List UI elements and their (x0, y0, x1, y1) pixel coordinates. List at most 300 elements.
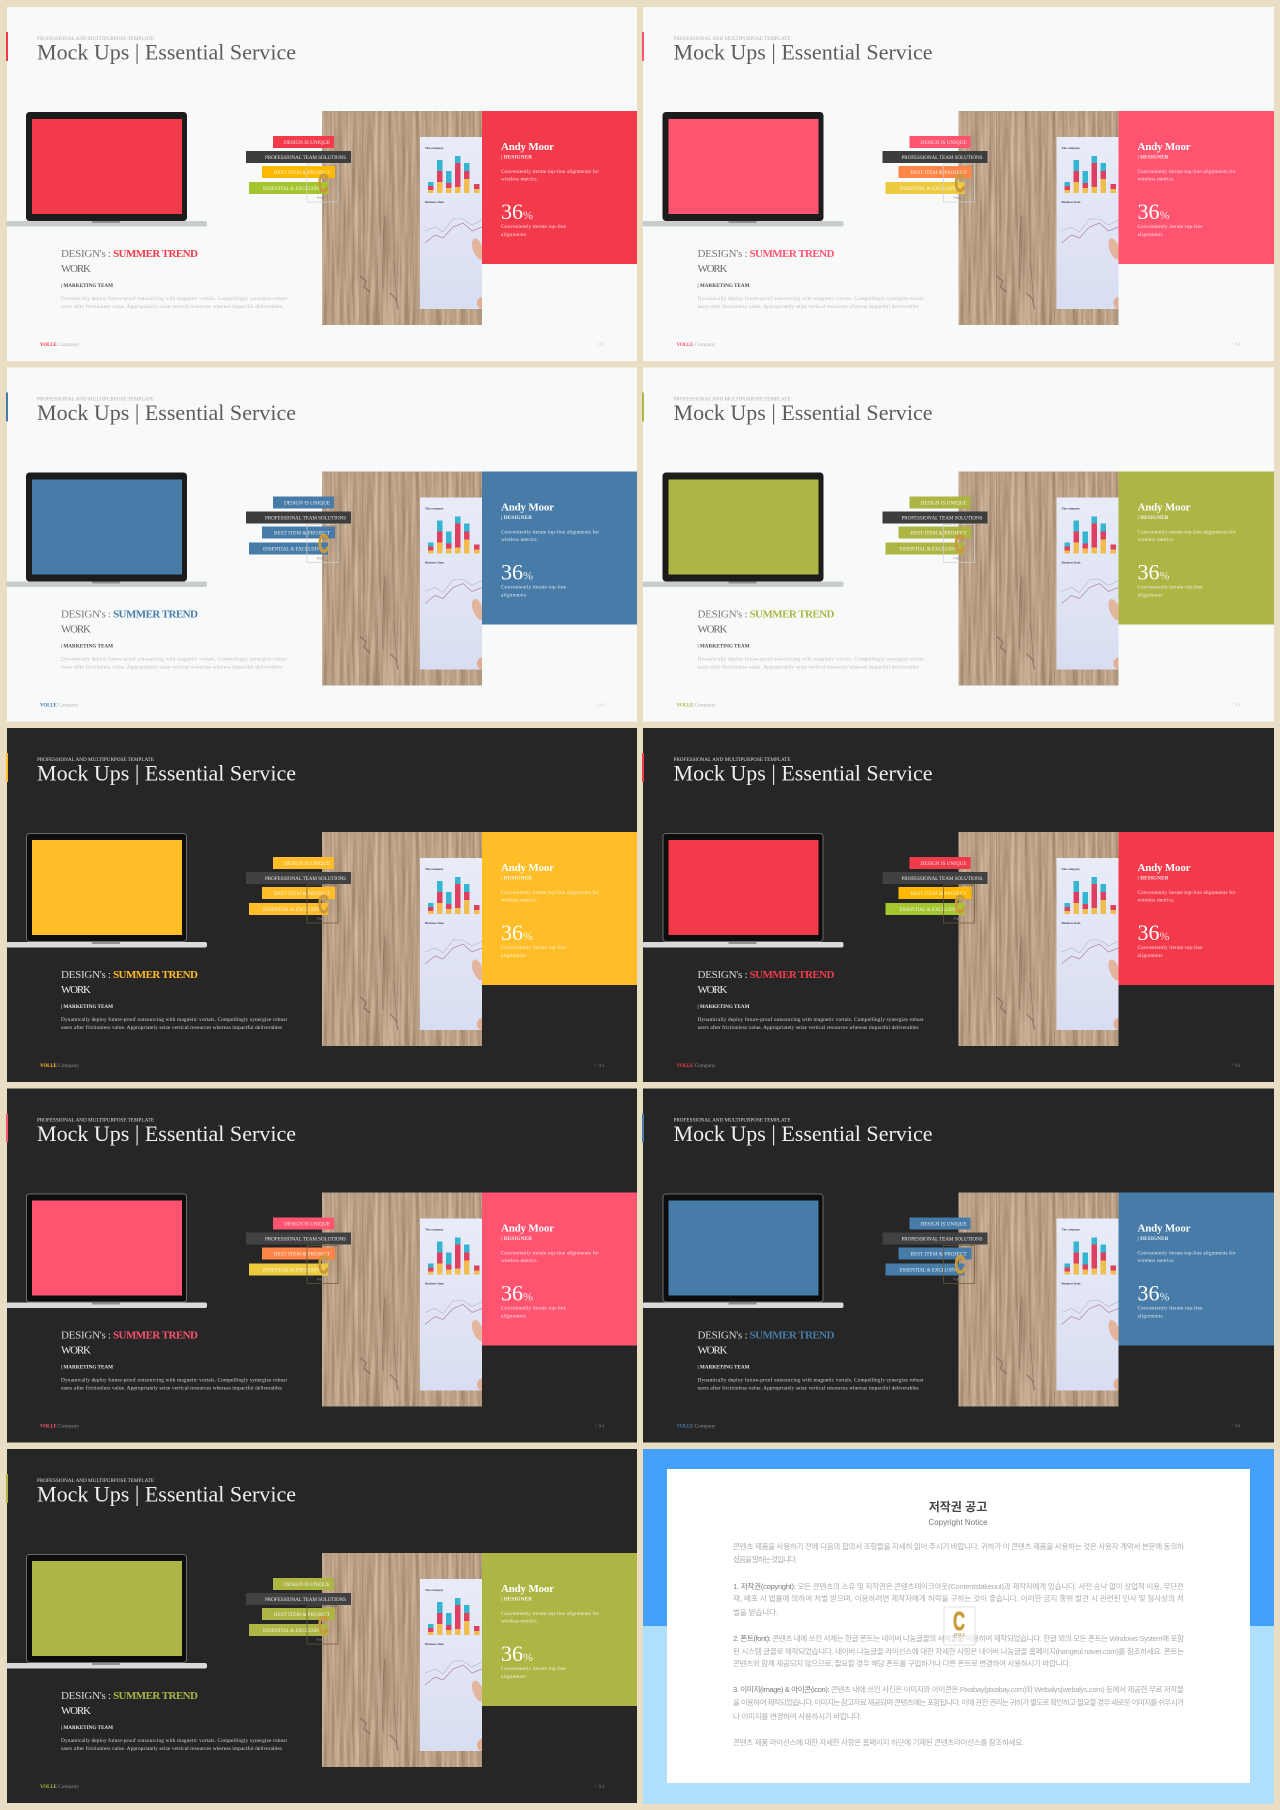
design heading (698, 1330, 835, 1356)
description: users after frictionless value. Appropriately seize vertical resources whereas impactful deliverables (61, 1024, 282, 1031)
accent bar (6, 1114, 8, 1142)
design heading: SUMMER TREND (750, 608, 835, 620)
colour panel: Andy Moor (1138, 141, 1191, 153)
design heading (698, 969, 835, 996)
colour panel: % (1160, 1290, 1170, 1304)
tag list: BEST ITEM & PROJECT (274, 1612, 331, 1618)
tag list: DESIGN IS UNIQUE (284, 1222, 330, 1228)
title: PROFESSIONAL AND MULTIPURPOSE TEMPLATE (674, 1118, 790, 1124)
photo with charts (322, 1192, 487, 1406)
watermark: Free (954, 196, 961, 200)
colour panel: | DESIGNER (1138, 876, 1169, 882)
design heading: DESIGN's : (61, 1690, 111, 1702)
watermark (944, 1606, 975, 1645)
footer: VOLLE (676, 342, 694, 348)
tag list: PROFESSIONAL TEAM SOLUTIONS (265, 1597, 346, 1603)
colour panel (482, 472, 637, 624)
tag list (882, 136, 988, 194)
watermark (307, 1246, 338, 1284)
footer: Company (58, 1063, 79, 1069)
photo with charts (958, 472, 1124, 686)
footer: VOLLE (40, 342, 58, 348)
colour panel: wireless metrics. (1138, 176, 1174, 182)
footer: VOLLE (40, 1424, 58, 1430)
footer: / 04 (1232, 1064, 1241, 1069)
colour panel: Conveniently iterate top-line alignments for (1138, 528, 1236, 536)
clause 3: 3. 이미지(image) & 아이콘(icon): 콘텐츠 내에 쓰인 사진은 이미지와 아이콘은 Pixabay(pixabay.com)와 Webalys(webalys.com) 등에서 제공한 무료 저작물 (733, 1684, 1184, 1694)
team label: | MARKETING TEAM (61, 1004, 113, 1010)
footer: / 04 (1232, 1424, 1241, 1430)
colour panel: Conveniently iterate top-line (501, 584, 567, 590)
clause 2: 2. 폰트(font): 콘텐츠 내에 쓰인 서체는 한글 폰트는 네이버 나눔글꼴의 서체들을 이용하여 제작되었습니다. 한글 외의 모든 폰트는 Windows System에 포함 (733, 1633, 1184, 1643)
footer (40, 1063, 604, 1069)
colour panel: alignments (501, 592, 526, 598)
tag list: DESIGN IS UNIQUE (920, 500, 966, 506)
design heading: SUMMER TREND (113, 248, 198, 260)
colour panel: Conveniently iterate top-line alignments for (1138, 1250, 1236, 1256)
watermark: C (954, 168, 966, 198)
design heading: DESIGN's : (61, 248, 111, 260)
design heading (61, 969, 198, 996)
tag list: ESSENTIAL & EXCLUSIVE (263, 1268, 323, 1274)
watermark: C (318, 528, 329, 558)
colour panel: alignments (1138, 953, 1162, 959)
watermark: Free (954, 556, 961, 560)
accent bar (642, 753, 644, 782)
description: users after frictionless value. Appropriately seize vertical resources whereas impactful deliverables (61, 303, 282, 310)
title: Mock Ups | Essential Service (37, 1121, 296, 1146)
design heading: DESIGN's : (698, 248, 748, 260)
colour panel (1118, 832, 1274, 985)
footer: Company (58, 702, 79, 708)
slide 5: dark amber (6, 728, 637, 1082)
copyright heading: Copyright Notice (928, 1518, 988, 1527)
design heading: WORK (61, 1705, 91, 1717)
laptop mockup (6, 1194, 207, 1308)
colour panel: | DESIGNER (501, 154, 532, 160)
title: PROFESSIONAL AND MULTIPURPOSE TEMPLATE (674, 757, 790, 763)
title: PROFESSIONAL AND MULTIPURPOSE TEMPLATE (37, 1478, 154, 1484)
accent bar (642, 392, 644, 422)
title: PROFESSIONAL AND MULTIPURPOSE TEMPLATE (37, 36, 154, 42)
design heading (698, 608, 835, 636)
description: Dynamically deploy future-proof outsourcing with magnetic vortals. Compellingly synergize robust (61, 1016, 288, 1023)
description (61, 656, 288, 670)
photo with charts (958, 832, 1124, 1046)
colour panel (1118, 111, 1274, 264)
description: Dynamically deploy future-proof outsourcing with magnetic vortals. Compellingly synergize robust (61, 295, 288, 302)
colour panel: Conveniently iterate top-line alignments for (501, 1610, 599, 1617)
design heading: DESIGN's : (698, 1330, 748, 1342)
description: users after frictionless value. Appropriately seize vertical resources whereas impactful deliverables (698, 1024, 918, 1031)
colour panel: Andy Moor (501, 141, 554, 153)
footer: VOLLE (40, 702, 58, 708)
watermark (307, 164, 338, 202)
colour panel: % (1160, 208, 1170, 222)
design heading: DESIGN's : (61, 969, 111, 981)
design heading: SUMMER TREND (113, 608, 198, 620)
colour panel: Conveniently iterate top-line (501, 1306, 567, 1312)
watermark: C (318, 1250, 329, 1280)
team label: | MARKETING TEAM (61, 1364, 113, 1370)
closing line: 콘텐츠 제품 라이선스에 대한 자세한 사항은 홈페이지 하단에 기재된 콘텐츠라이선스를 참조하세요. (733, 1737, 1024, 1747)
tag list: DESIGN IS UNIQUE (920, 140, 966, 146)
colour panel: wireless metrics. (501, 1618, 538, 1624)
tag list (246, 1218, 351, 1276)
colour panel: % (523, 929, 533, 943)
title: Mock Ups | Essential Service (674, 400, 932, 425)
description (698, 1016, 924, 1031)
colour panel (482, 832, 637, 985)
tag list: ESSENTIAL & EXCLUSIVE (900, 186, 960, 192)
footer (676, 702, 1241, 708)
tag list: DESIGN IS UNIQUE (920, 1222, 966, 1228)
title: PROFESSIONAL AND MULTIPURPOSE TEMPLATE (674, 36, 790, 42)
design heading (61, 1690, 198, 1717)
colour panel: wireless metrics. (501, 898, 538, 904)
intro paragraph (733, 1541, 1184, 1564)
colour panel: % (523, 568, 533, 582)
title: Mock Ups | Essential Service (37, 40, 296, 64)
colour panel: 36 (1138, 920, 1160, 945)
colour panel (482, 1192, 637, 1346)
photo with charts (958, 111, 1124, 325)
colour panel: alignments (501, 1674, 526, 1680)
accent bar (642, 1114, 644, 1142)
title: PROFESSIONAL AND MULTIPURPOSE TEMPLATE (37, 757, 154, 763)
laptop mockup (642, 112, 844, 226)
clause 1: 재, 배포 시 법률에 의하여 처벌 받으며, 이용하려면 제작자에게 허락을 구하는 것이 좋습니다. 이러한 금지 행위 발견 시 관련된 민사 및 형사상의 처 (733, 1593, 1184, 1603)
description: Dynamically deploy future-proof outsourcing with magnetic vortals. Compellingly synergize robust (698, 1016, 924, 1023)
colour panel: 36 (501, 199, 523, 224)
description (61, 1737, 288, 1752)
design heading: SUMMER TREND (113, 1330, 198, 1342)
colour panel: Conveniently iterate top-line (501, 1666, 567, 1672)
description: users after frictionless value. Appropriately seize vertical resources whereas impactful deliverables (61, 1384, 282, 1392)
intro paragraph: 셨음을 말하는 것입니다. (733, 1554, 797, 1564)
tag list: BEST ITEM & PROJECT (274, 1252, 331, 1258)
watermark: Free (317, 917, 324, 921)
title: PROFESSIONAL AND MULTIPURPOSE TEMPLATE (37, 1118, 154, 1124)
colour panel: alignments (1138, 1314, 1162, 1320)
laptop mockup (642, 1194, 844, 1308)
design heading (698, 248, 835, 275)
footer: Company (694, 702, 716, 708)
accent bar (6, 32, 8, 61)
colour panel: 36 (501, 1280, 523, 1306)
colour panel: Conveniently iterate top-line (501, 945, 567, 951)
team label: | MARKETING TEAM (698, 644, 750, 650)
colour panel: Conveniently iterate top-line (501, 224, 567, 230)
description: Dynamically deploy future-proof outsourcing with magnetic vortals. Compellingly synergize robust (698, 1376, 924, 1384)
colour panel: Conveniently iterate top-line alignments for (1138, 168, 1236, 175)
colour panel: % (1160, 929, 1170, 943)
colour panel: wireless metrics. (1138, 537, 1174, 543)
footer: VOLLE (40, 1063, 58, 1069)
watermark: C (318, 1610, 329, 1640)
colour panel: % (523, 208, 533, 222)
watermark: C (954, 889, 966, 919)
description: users after frictionless value. Appropriately seize vertical resources whereas impactful deliverables (698, 303, 918, 310)
description: Dynamically deploy future-proof outsourcing with magnetic vortals. Compellingly synergize robust (698, 656, 924, 662)
photo with charts (322, 111, 487, 325)
tag list: DESIGN IS UNIQUE (284, 140, 330, 146)
colour panel: alignments (1138, 592, 1162, 598)
team label: | MARKETING TEAM (698, 1004, 750, 1010)
footer: Company (694, 1063, 716, 1069)
photo with charts (958, 1192, 1124, 1406)
watermark (944, 1246, 974, 1284)
clause 3 (733, 1684, 1184, 1721)
colour panel: | DESIGNER (1138, 1236, 1169, 1242)
design heading: WORK (698, 263, 728, 275)
slide 7: dark pink (6, 1088, 637, 1442)
design heading: SUMMER TREND (750, 1330, 835, 1342)
tag list: ESSENTIAL & EXCLUSIVE (263, 186, 323, 192)
footer (40, 342, 604, 348)
colour panel: 36 (1138, 1280, 1160, 1306)
laptop mockup (6, 1554, 207, 1668)
title: Mock Ups | Essential Service (674, 40, 932, 64)
accent bar (6, 753, 8, 782)
design heading: WORK (61, 1344, 91, 1356)
colour panel: Andy Moor (501, 1583, 554, 1595)
colour panel: Andy Moor (1138, 502, 1191, 514)
tag list: BEST ITEM & PROJECT (274, 170, 331, 176)
design heading: WORK (61, 624, 91, 636)
title: PROFESSIONAL AND MULTIPURPOSE TEMPLATE (37, 396, 154, 402)
colour panel: Andy Moor (1138, 862, 1191, 874)
tag list: ESSENTIAL & EXCLUSIVE (263, 907, 323, 913)
tag list: PROFESSIONAL TEAM SOLUTIONS (902, 1236, 983, 1242)
title: Mock Ups | Essential Service (674, 1121, 932, 1146)
slide 3: light blue (6, 368, 637, 722)
clause 2 (733, 1633, 1184, 1668)
description (698, 1376, 924, 1392)
laptop mockup (642, 473, 844, 587)
footer: VOLLE (676, 1424, 694, 1430)
watermark: C (318, 168, 329, 198)
watermark: C (953, 1606, 965, 1636)
description (698, 295, 924, 310)
clause 1: 벌을 받습니다. (733, 1607, 778, 1617)
colour panel: Conveniently iterate top-line alignments for (501, 1250, 599, 1256)
slide 4: light olive (642, 368, 1274, 722)
footer (676, 1424, 1241, 1430)
design heading: WORK (698, 624, 728, 636)
tag list: BEST ITEM & PROJECT (910, 530, 967, 536)
colour panel: | DESIGNER (1138, 515, 1169, 521)
colour panel: Conveniently iterate top-line (1138, 1306, 1203, 1312)
colour panel: wireless metrics. (501, 537, 538, 543)
watermark: C (954, 528, 966, 558)
colour panel: Conveniently iterate top-line (1138, 584, 1203, 590)
laptop mockup (6, 112, 207, 226)
tag list: ESSENTIAL & EXCLUSIVE (900, 546, 960, 552)
description: users after frictionless value. Appropriately seize vertical resources whereas impactful deliverables (698, 664, 918, 670)
colour panel: Conveniently iterate top-line (1138, 945, 1203, 951)
footer: / 04 (595, 1785, 604, 1790)
description: users after frictionless value. Appropriately seize vertical resources whereas impactful deliverables (61, 1745, 282, 1752)
tag list: BEST ITEM & PROJECT (274, 891, 331, 897)
description: users after frictionless value. Appropriately seize vertical resources whereas impactful deliverables (61, 664, 282, 670)
footer (676, 342, 1241, 348)
tag list (882, 1218, 988, 1276)
description: Dynamically deploy future-proof outsourcing with magnetic vortals. Compellingly synergize robust (61, 1376, 288, 1384)
footer: Company (58, 342, 79, 348)
design heading: SUMMER TREND (113, 969, 198, 981)
watermark (944, 885, 974, 923)
tag list: DESIGN IS UNIQUE (284, 1582, 330, 1588)
watermark (944, 164, 974, 202)
colour panel: | DESIGNER (1138, 154, 1169, 160)
team label: | MARKETING TEAM (61, 283, 113, 289)
watermark: Free (954, 917, 961, 921)
footer: / 04 (595, 704, 604, 708)
footer: VOLLE (40, 1784, 58, 1790)
colour panel: | DESIGNER (501, 515, 532, 521)
team label: | MARKETING TEAM (698, 283, 750, 289)
slide 2: light pink (642, 7, 1274, 361)
watermark: Free (317, 1278, 324, 1282)
tag list: PROFESSIONAL TEAM SOLUTIONS (265, 1236, 346, 1242)
tag list: PROFESSIONAL TEAM SOLUTIONS (265, 876, 346, 882)
clause 2: 된 시스템 글꼴로 제작되었습니다. 네이버 나눔글꼴 라이선스에 대한 자세한 사항은 네이버 나눔글꼴 홈페이지(hangeul.naver.com)를 참조하세요. 폰트는 (733, 1646, 1184, 1656)
accent bar (642, 32, 644, 61)
watermark: Free (317, 556, 324, 560)
tag list: PROFESSIONAL TEAM SOLUTIONS (265, 155, 346, 161)
title: Mock Ups | Essential Service (37, 760, 296, 786)
tag list: PROFESSIONAL TEAM SOLUTIONS (265, 516, 346, 522)
title: Mock Ups | Essential Service (37, 400, 296, 425)
design heading: WORK (61, 263, 91, 275)
colour panel: Conveniently iterate top-line alignments for (501, 168, 599, 175)
colour panel: 36 (501, 920, 523, 945)
design heading: SUMMER TREND (113, 1690, 198, 1702)
footer: Company (58, 1784, 79, 1790)
colour panel: 36 (1138, 560, 1160, 584)
footer: / 04 (1232, 704, 1241, 708)
intro paragraph: 콘텐츠 제품을 사용하기 전에 다음의 합의서 조항들을 자세히 읽어 주시기 바랍니다. 귀하가 이 콘텐츠 제품을 사용하는 것은 사용자 계약서 본문에 동의하 (733, 1541, 1184, 1551)
clause 1: 1. 저작권(copyright): 모든 콘텐츠의 소유 및 저작권은 콘텐츠테이크아웃(Contentstakeout)과 제작자에게 있습니다. 사전 승낙 없이 상업적 이용, 무단전 (733, 1581, 1184, 1591)
footer (676, 1063, 1241, 1069)
description: Dynamically deploy future-proof outsourcing with magnetic vortals. Compellingly synergize robust (61, 656, 288, 662)
colour panel: % (523, 1650, 533, 1664)
footer: VOLLE (676, 702, 694, 708)
description (698, 656, 924, 670)
photo with charts (322, 1553, 487, 1767)
colour panel: Andy Moor (1138, 1222, 1191, 1234)
design heading: DESIGN's : (698, 969, 748, 981)
colour panel: | DESIGNER (501, 876, 532, 882)
watermark: C (318, 889, 329, 919)
tag list (246, 1578, 351, 1636)
colour panel: 36 (501, 1641, 523, 1666)
tag list: ESSENTIAL & EXCLUSIVE (900, 907, 960, 913)
clause 2: 콘텐츠와 함께 제공되지 않으므로, 필요할 경우 해당 폰트를 구입하거나 다른 폰트로 변경하여 사용하시기 바랍니다. (733, 1658, 1071, 1668)
colour panel: % (1160, 568, 1170, 582)
tag list: PROFESSIONAL TEAM SOLUTIONS (902, 516, 983, 522)
design heading (61, 1330, 198, 1356)
colour panel: alignments (501, 953, 526, 959)
watermark: Free (954, 1278, 961, 1282)
tag list: ESSENTIAL & EXCLUSIVE (263, 1628, 323, 1634)
colour panel: alignments (501, 1314, 526, 1320)
photo with charts (322, 472, 487, 686)
photo with charts (322, 832, 487, 1046)
colour panel: alignments (1138, 232, 1162, 238)
title: Mock Ups | Essential Service (37, 1482, 296, 1506)
colour panel: wireless metrics. (501, 176, 538, 182)
design heading: WORK (698, 984, 728, 996)
design heading: DESIGN's : (698, 608, 748, 620)
colour panel (1118, 472, 1274, 624)
watermark (307, 885, 338, 923)
tag list: PROFESSIONAL TEAM SOLUTIONS (902, 155, 983, 161)
design heading (61, 248, 198, 275)
colour panel: 36 (1138, 199, 1160, 224)
colour panel: wireless metrics. (1138, 898, 1174, 904)
tag list (882, 857, 988, 915)
title: PROFESSIONAL AND MULTIPURPOSE TEMPLATE (674, 396, 790, 402)
accent bar (6, 1474, 8, 1503)
footer: Company (694, 342, 716, 348)
slide 9: dark olive (6, 1449, 637, 1803)
colour panel: Conveniently iterate top-line alignments for (1138, 889, 1236, 896)
colour panel: wireless metrics. (501, 1258, 538, 1264)
footer: / 04 (595, 1064, 604, 1069)
accent bar (6, 392, 8, 422)
copyright heading: 저작권 공고 (929, 1499, 987, 1514)
slide 6: dark red (642, 728, 1274, 1082)
tag list: BEST ITEM & PROJECT (910, 170, 967, 176)
colour panel: wireless metrics. (1138, 1258, 1174, 1264)
clause 1 (733, 1581, 1184, 1617)
tag list: DESIGN IS UNIQUE (284, 500, 330, 506)
footer: Company (694, 1424, 716, 1430)
description (61, 1376, 288, 1392)
colour panel (482, 1553, 637, 1706)
colour panel: | DESIGNER (501, 1236, 532, 1242)
watermark: Free (317, 196, 324, 200)
tag list: DESIGN IS UNIQUE (284, 861, 330, 867)
slide 8: dark blue (642, 1088, 1274, 1442)
laptop mockup (642, 834, 844, 948)
watermark: Free (317, 1638, 324, 1642)
footer: / 04 (595, 343, 604, 348)
design heading: DESIGN's : (61, 608, 111, 620)
footer (40, 1424, 604, 1430)
colour panel: Andy Moor (501, 862, 554, 874)
team label: | MARKETING TEAM (61, 644, 113, 650)
tag list (246, 136, 351, 194)
footer (40, 1784, 604, 1790)
tag list: BEST ITEM & PROJECT (910, 1252, 967, 1258)
footer: VOLLE (676, 1063, 694, 1069)
description: users after frictionless value. Appropriately seize vertical resources whereas impactful deliverables (698, 1384, 918, 1392)
colour panel: Conveniently iterate top-line alignments for (501, 528, 599, 536)
design heading (61, 608, 198, 636)
design heading: SUMMER TREND (750, 248, 835, 260)
tag list: PROFESSIONAL TEAM SOLUTIONS (902, 876, 983, 882)
copyright heading (928, 1499, 988, 1527)
colour panel (482, 111, 637, 264)
design heading: SUMMER TREND (750, 969, 835, 981)
design heading: DESIGN's : (61, 1330, 111, 1342)
colour panel: alignments (501, 232, 526, 238)
colour panel: % (523, 1290, 533, 1304)
tag list: DESIGN IS UNIQUE (920, 861, 966, 867)
